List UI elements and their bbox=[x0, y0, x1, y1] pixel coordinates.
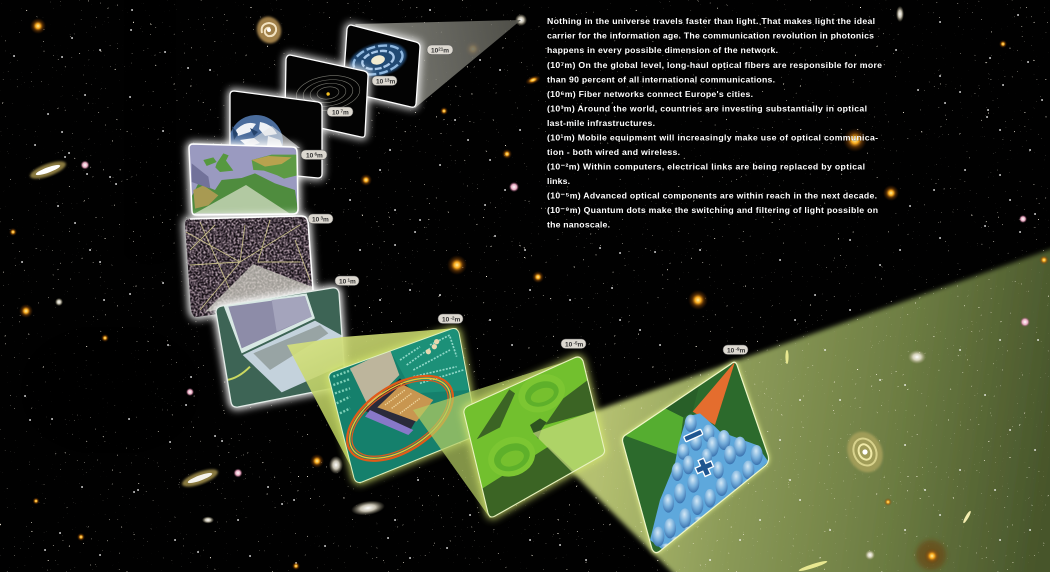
panel: quantum dots card bbox=[615, 355, 775, 560]
galaxy: elongated lower left bbox=[180, 466, 220, 490]
map: land masses bbox=[192, 153, 298, 213]
label: 10^-2 m: -2 bbox=[449, 315, 455, 320]
panel: laptop card bbox=[210, 284, 350, 410]
label: 10^21 m bbox=[427, 45, 453, 54]
icon: earth globe bbox=[230, 115, 283, 146]
label: 10^3 m bbox=[308, 214, 333, 224]
text block: introduction and scale notes: (10¹m) Mobile equipment will increasingly make use of optical communica- bbox=[547, 132, 878, 142]
panel: spiral galaxy card bbox=[340, 20, 425, 112]
label: 10^7 m: 10 bbox=[332, 109, 339, 116]
icon: spiral galaxy bbox=[348, 42, 408, 78]
label: 10^13 m: 10 bbox=[376, 78, 383, 85]
icon: plus sign bbox=[694, 457, 714, 478]
label: 10^-2 m: 10 bbox=[442, 316, 449, 323]
label: 10^-9 m bbox=[723, 345, 748, 354]
label: 10^-5 m: -5 bbox=[572, 340, 578, 345]
text block: introduction and scale notes: last-mile infrastructures. bbox=[547, 118, 655, 128]
text block: introduction and scale notes: happens in every possible dimension of the network. bbox=[547, 45, 778, 55]
label: 10^-2 m: m bbox=[454, 316, 460, 323]
icon: planetary orbits bbox=[296, 75, 360, 111]
label: 10^-2 m bbox=[438, 314, 463, 324]
beam: pale light from earth to europe bbox=[240, 126, 300, 148]
dark substrate bbox=[482, 446, 574, 516]
icon: lower ring bbox=[488, 437, 536, 477]
text block: introduction and scale notes: tion - both wired and wireless. bbox=[547, 147, 680, 157]
map: city street network bbox=[186, 220, 310, 310]
text block: introduction and scale notes: (10³m) Around the world, countries are investing substantially in optical bbox=[547, 103, 867, 113]
label: 10^-9 m: -9 bbox=[734, 346, 740, 351]
icon: fiber ring bbox=[346, 374, 454, 462]
label: 10^-9 m: m bbox=[740, 347, 746, 354]
galaxy: yellow spiral in beam bbox=[841, 426, 889, 478]
beam: gray cone from distant galaxy bbox=[355, 20, 521, 108]
text block: introduction and scale notes: the nanoscale. bbox=[547, 220, 610, 230]
text block: introduction and scale notes: links. bbox=[547, 176, 570, 186]
beam: pale light from city to laptop bbox=[205, 264, 320, 312]
quantum dot cluster bbox=[650, 413, 768, 550]
text block: introduction and scale notes: carrier for the information age. The communication revolution in photonics bbox=[547, 31, 874, 41]
galaxy: tan spiral top left bbox=[253, 13, 285, 47]
label: 10^3 m: m bbox=[323, 216, 329, 223]
text block: introduction and scale notes: (10⁷m) On the global level, long-haul optical fibers are responsible for more bbox=[547, 60, 882, 70]
beam: light overlay on ring card bbox=[533, 410, 604, 472]
label: 10^21 m: m bbox=[443, 47, 449, 54]
label: 10^-9 m: 10 bbox=[727, 347, 734, 354]
label: 10^6 m bbox=[301, 150, 327, 160]
galaxy: orange star with halo in beam bbox=[916, 540, 946, 570]
coupling gap bbox=[530, 418, 547, 439]
label: 10^1 m: 10 bbox=[339, 278, 346, 285]
beam: pale light from europe to city bbox=[192, 185, 292, 215]
icon: upper ring bbox=[518, 374, 565, 412]
label: 10^6 m: 10 bbox=[306, 152, 313, 159]
beam: green light from laptop to circuit board bbox=[287, 328, 457, 484]
label: 10^13 m: 13 bbox=[383, 77, 390, 82]
circuit traces area bbox=[390, 327, 468, 393]
bright green region bbox=[623, 407, 683, 455]
label: 10^1 m: 1 bbox=[346, 277, 350, 282]
icon: minus sign bbox=[684, 429, 703, 442]
panel: city network card bbox=[180, 212, 320, 322]
beam: large green light cone to the right edge bbox=[533, 246, 1050, 572]
label: 10^-5 m bbox=[561, 339, 586, 348]
label: 10^-5 m: m bbox=[578, 341, 584, 348]
label: 10^7 m bbox=[327, 107, 353, 116]
label: 10^1 m bbox=[335, 276, 359, 286]
label: 10^6 m: m bbox=[317, 152, 323, 159]
label: 10^6 m: 6 bbox=[313, 151, 317, 156]
panel: earth card bbox=[225, 85, 325, 183]
label: 10^7 m: 7 bbox=[339, 108, 343, 113]
text block: introduction and scale notes bbox=[547, 16, 882, 230]
text block: introduction and scale notes: (10⁻⁵m) Advanced optical components are within reach in the next decade. bbox=[547, 190, 877, 200]
text block: introduction and scale notes: (10⁻⁹m) Quantum dots make the switching and filtering of light possible on bbox=[547, 205, 878, 215]
panel: solar system card bbox=[280, 50, 372, 142]
text block: introduction and scale notes: than 90 percent of all international communications. bbox=[547, 74, 775, 84]
label: 10^13 m: m bbox=[390, 78, 396, 85]
label: 10^1 m: m bbox=[350, 278, 356, 285]
label: 10^3 m: 3 bbox=[319, 215, 323, 220]
panel: circuit board card bbox=[325, 325, 485, 485]
text block: introduction and scale notes: Nothing in the universe travels faster than light. That makes light the ideal bbox=[547, 16, 875, 26]
label: 10^7 m: m bbox=[343, 109, 349, 116]
panel: ring resonator card bbox=[460, 350, 610, 523]
text block: introduction and scale notes: (10⁶m) Fiber networks connect Europe's cities. bbox=[547, 89, 753, 99]
label: 10^3 m: 10 bbox=[312, 216, 319, 223]
label: 10^13 m bbox=[372, 76, 397, 86]
icon: silver connector lid bbox=[350, 349, 399, 407]
beam: green light from circuit board to ring resonator bbox=[413, 357, 605, 518]
label: 10^21 m: 10 bbox=[431, 47, 438, 54]
panel: europe map card bbox=[185, 140, 301, 218]
icon: laptop bbox=[223, 293, 347, 392]
orange region bbox=[693, 362, 735, 425]
label: 10^-5 m: 10 bbox=[565, 341, 572, 348]
label: 10^21 m: 21 bbox=[438, 46, 444, 51]
icon: gold chip bbox=[377, 384, 433, 422]
galaxy: elongated left bbox=[28, 158, 68, 182]
text block: introduction and scale notes: (10⁻²m) Within computers, electrical links are being replaced by optical bbox=[547, 161, 865, 171]
